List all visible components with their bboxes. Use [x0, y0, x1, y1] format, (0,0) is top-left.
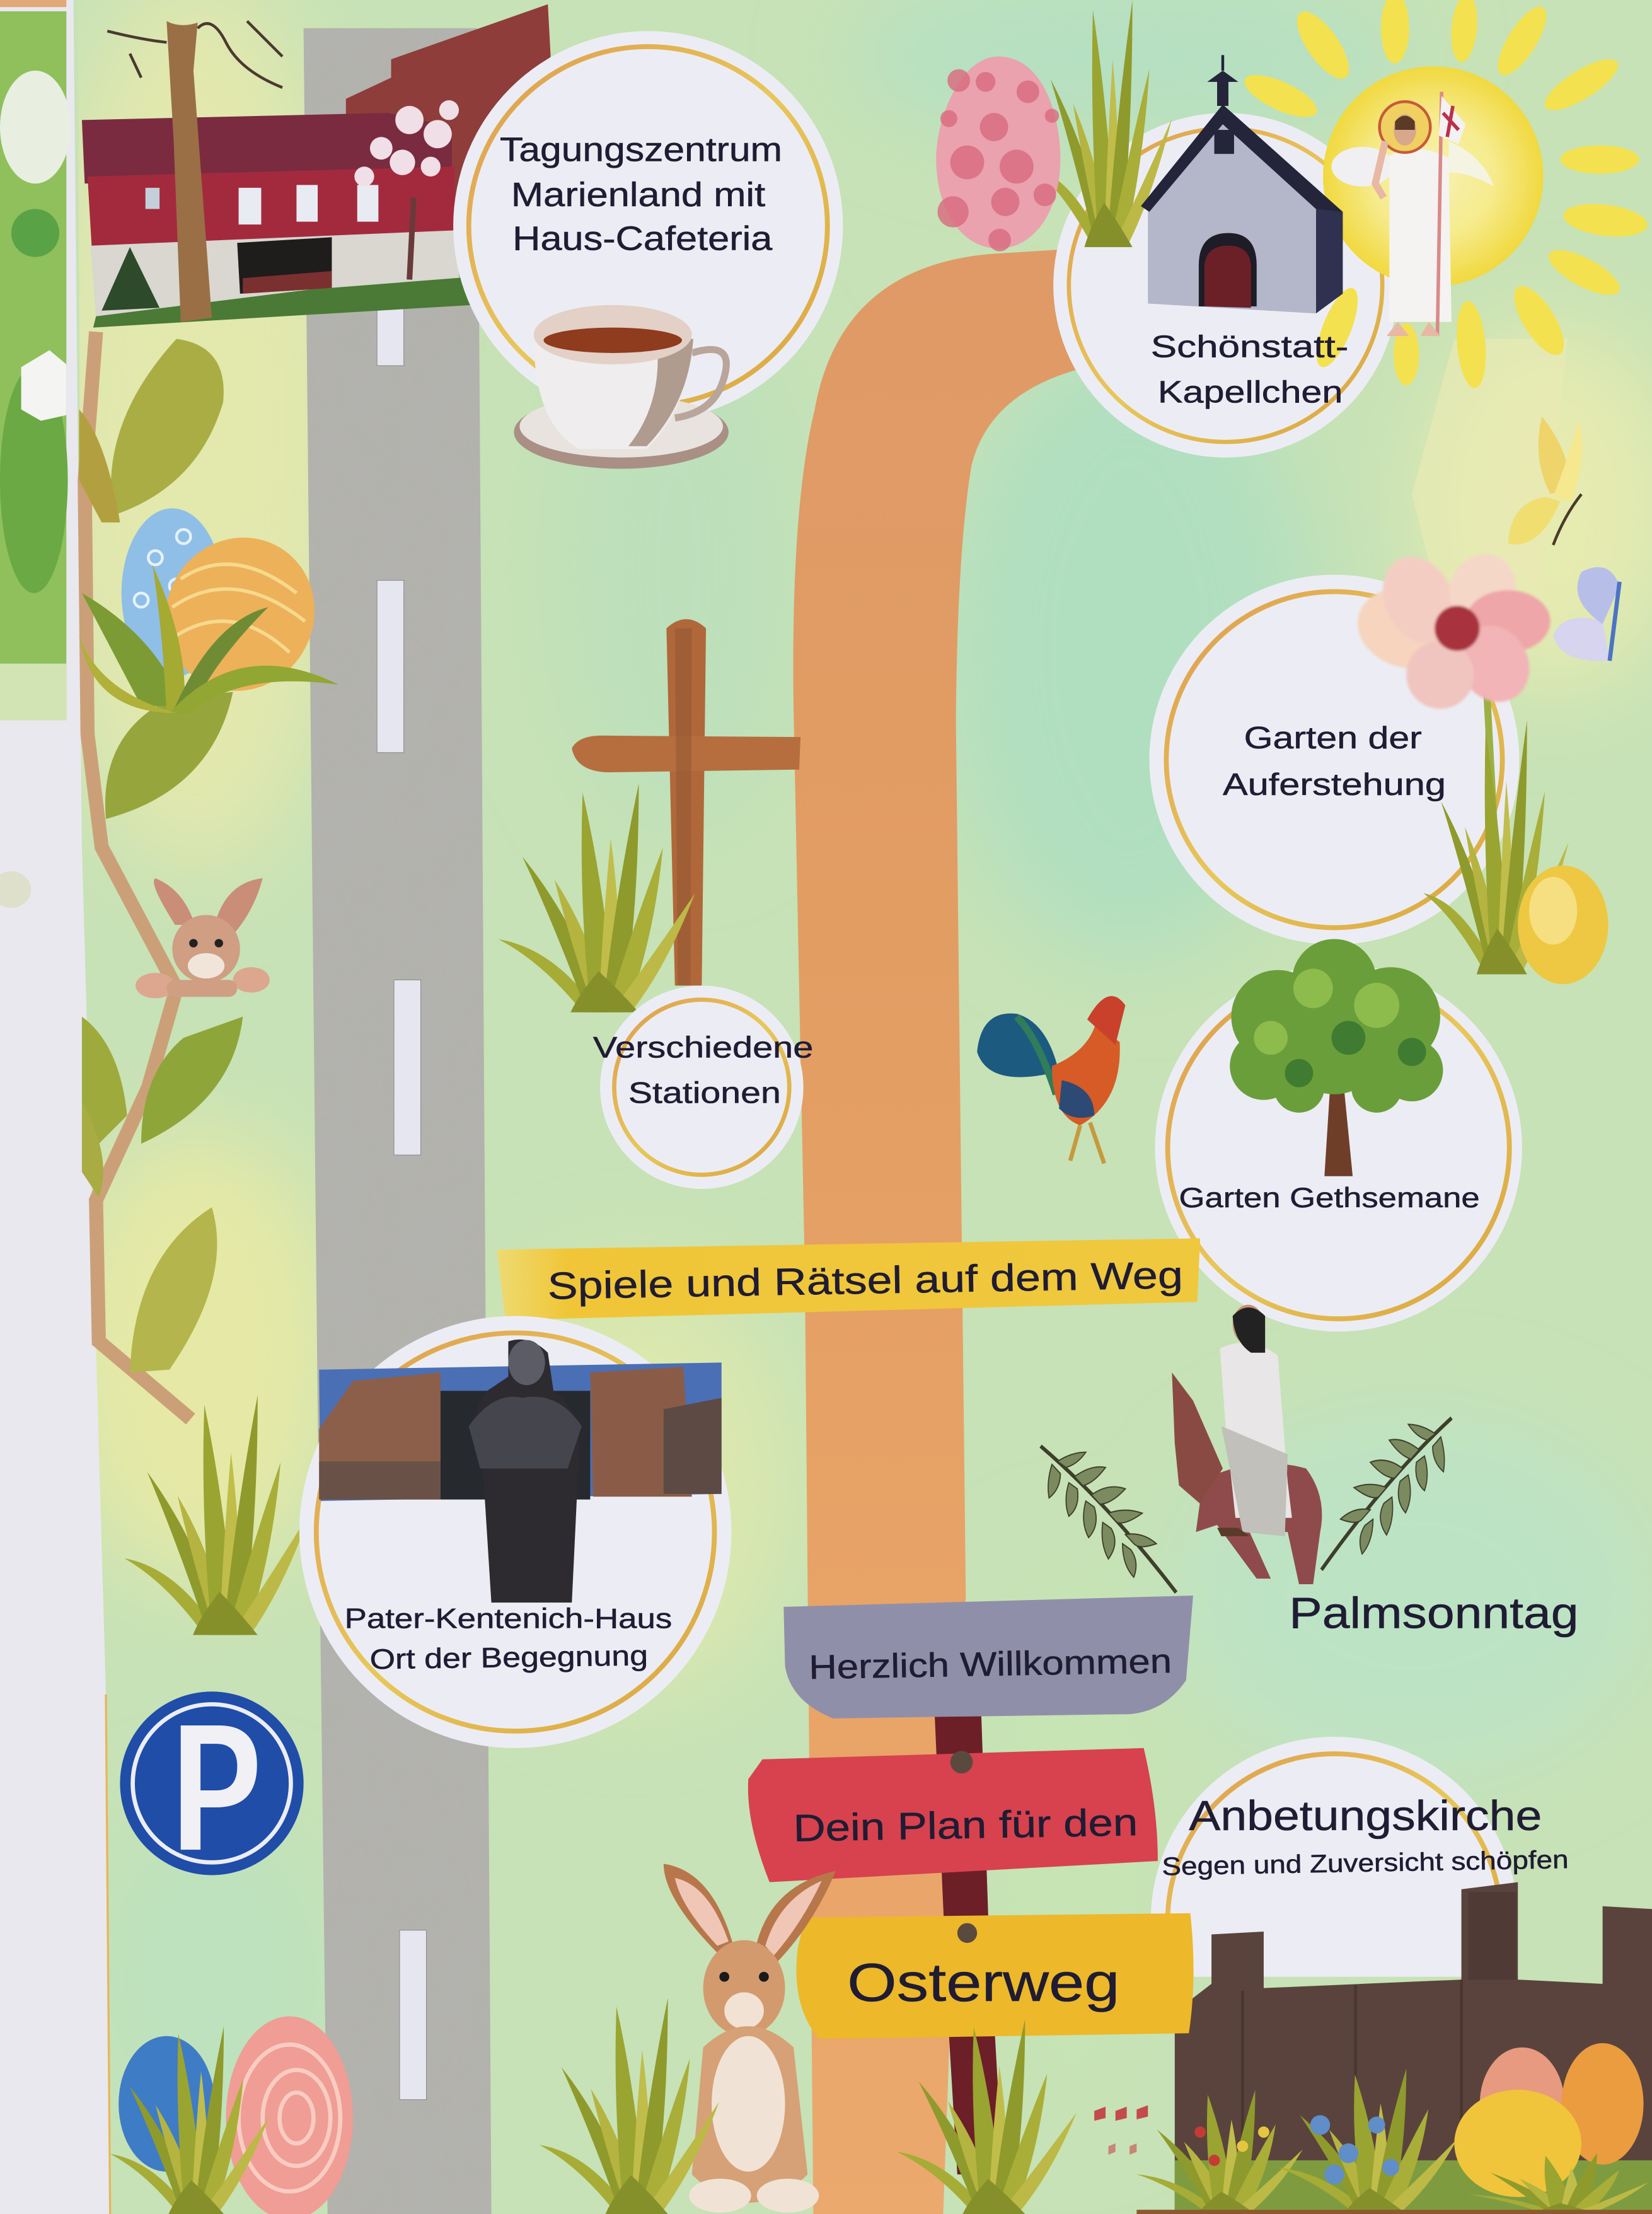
label: Schönstatt-Kapellchen: Schönstatt-: [1151, 330, 1348, 364]
sign: Dein Plan für den: Dein Plan für den: [793, 1800, 1138, 1850]
icon: flower meadow with eggs: [1136, 2043, 1652, 2214]
icon: risen Christ with flag: [1331, 92, 1494, 336]
signpost: [748, 1596, 1194, 2174]
panel: Garten der Auferstehung: [1149, 545, 1609, 984]
icon: Palm Sunday donkey with Jesus: [1041, 1305, 1452, 1592]
label: Anbetungskirche: Segen und Zuversicht schöpfen: [1162, 1845, 1569, 1881]
panel: Schönstatt-Kapellchen: [936, 0, 1649, 458]
icon: yellow butterfly: [1508, 417, 1582, 545]
panel: Garten Gethsemane: [1155, 939, 1522, 1331]
sign: Osterweg: Osterweg: [847, 1953, 1119, 2013]
label: Palmsonntag: Palmsonntag: [1289, 1588, 1579, 1637]
icon: coffee cup: [514, 305, 729, 469]
label: Pater-Kentenich-Haus: Pater-Kentenich-Haus: [345, 1603, 672, 1634]
label: Pater-Kentenich-Haus: Ort der Begegnung: [369, 1640, 648, 1675]
panel: Pater-Kentenich-Haus: [299, 1316, 731, 1748]
panel: Anbetungskirche: [1136, 1737, 1652, 2214]
label: Tagungszentrum: Marienland mit: [511, 176, 765, 214]
left branch with leaves: [79, 332, 243, 1419]
road markings: [377, 254, 427, 2100]
label: Pater-Kentenich-Haus: [345, 1603, 672, 1675]
icon: eggs bottom left: [110, 2016, 353, 2214]
label: Garten der Auferstehung: Auferstehung: [1223, 767, 1446, 802]
icon: palm branches: [1041, 1418, 1452, 1592]
panel: Tagungszentrum: [453, 31, 843, 469]
left neighbouring page strip: [0, 0, 71, 908]
icon: parking sign: [120, 1691, 304, 1875]
banner: Spiele und Rätsel: [497, 1238, 1200, 1320]
label: Tagungszentrum: Haus-Cafeteria: [512, 219, 772, 257]
label: Anbetungskirche: [1162, 1792, 1569, 1881]
icon: chapel: [1141, 55, 1343, 313]
photo: church: [1175, 1882, 1652, 2214]
sign: Herzlich Willkommen: [783, 1596, 1193, 1718]
bottom edge: [1136, 2210, 1652, 2214]
label: Garten der Auferstehung: Garten der: [1244, 721, 1422, 755]
icon: small red marks: [1094, 2106, 1148, 2155]
label: Verschiedene Stationen: [593, 1031, 813, 1109]
icon: wooden cross: [572, 619, 800, 985]
road: [304, 28, 492, 2214]
icon: grass and stalk: [1423, 692, 1569, 974]
label: Tagungszentrum: [500, 130, 782, 257]
label: Anbetungskirche: Anbetungskirche: [1189, 1792, 1542, 1840]
label: Garten Gethsemane: Garten Gethsemane: [1179, 1182, 1480, 1214]
banner: Spiele und Rätsel: Spiele und Rätsel auf dem Weg: [547, 1253, 1183, 1307]
icon: yellow egg: [1518, 866, 1609, 984]
icon: blue butterfly: [1553, 567, 1619, 661]
label: Tagungszentrum: Tagungszentrum: [500, 130, 782, 168]
label: Schönstatt-Kapellchen: Kapellchen: [1158, 374, 1343, 409]
icon: grass behind chapel: [1034, 0, 1172, 247]
icon: tree: [1230, 939, 1443, 1176]
icon: pink egg: [936, 57, 1060, 252]
icon: flower: [1348, 545, 1551, 715]
icon: standing rabbit: [664, 1864, 836, 2213]
photo: Tagungszentrum Marienland: [82, 4, 551, 328]
label: Garten der Auferstehung: [1223, 721, 1446, 802]
label: Verschiedene Stationen: Stationen: [628, 1075, 781, 1109]
sign: Herzlich Willkommen: Herzlich Willkommen: [809, 1642, 1172, 1686]
icon: statue: [469, 1340, 582, 1603]
icon: grass at rabbit: [540, 1998, 719, 2214]
icon: easter eggs with fan plant: [79, 508, 342, 718]
label: Schönstatt-Kapellchen: [1151, 330, 1348, 409]
panel: Verschiedene Stationen: [593, 985, 813, 1189]
photo: building: [319, 1362, 722, 1501]
icon: rabbit on branch: [136, 878, 270, 999]
icon: grass left: [124, 1395, 311, 1635]
sign: Dein Plan für den: [748, 1748, 1158, 1882]
icon: sun: [1239, 0, 1649, 390]
signpost pole: [935, 1715, 1000, 2174]
label: Verschiedene Stationen: Verschiedene: [593, 1031, 813, 1064]
icon: rooster: [977, 996, 1125, 1164]
icon: grass at cross: [499, 784, 695, 1012]
icon: grass at signpost: [897, 2019, 1077, 2214]
path: [794, 248, 1076, 2214]
sign: Osterweg: [796, 1913, 1194, 2039]
